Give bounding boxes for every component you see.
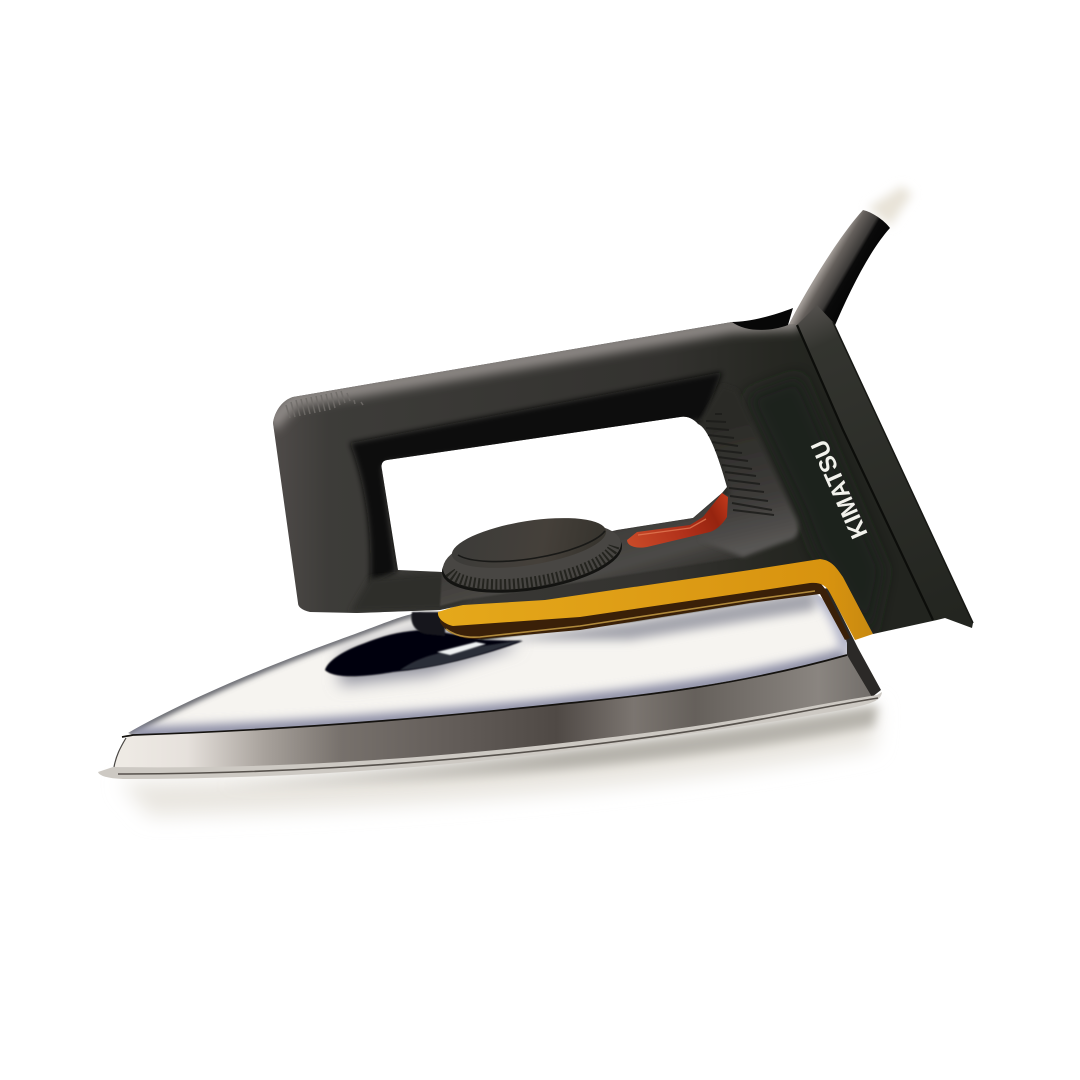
cord socket notch [732, 308, 793, 330]
brand label: KIMATSU [806, 436, 873, 543]
rear plate [797, 305, 973, 628]
power cable [786, 186, 912, 330]
dial top [449, 509, 609, 577]
front ledge [440, 492, 738, 606]
thumb wedge [700, 385, 798, 557]
tip detail [114, 738, 126, 767]
right rim edge [818, 588, 881, 697]
soleplate upper dome [128, 593, 847, 735]
dark area on the rear [750, 385, 879, 634]
yellow trim [438, 558, 873, 640]
left ledge [350, 572, 470, 612]
product illustration: Kimatsu iron [98, 184, 974, 822]
chrome dark reflection [325, 630, 523, 676]
heel grip ridges [286, 391, 363, 418]
temperature dial [437, 509, 627, 604]
dark recess around window [350, 372, 722, 585]
thumb rest ridges [706, 414, 774, 515]
crease line [122, 655, 847, 737]
red lever [627, 493, 728, 548]
knurled edge [450, 546, 614, 585]
reflection on surface [120, 705, 878, 816]
top edge highlight [270, 322, 800, 425]
gold underside of trim [440, 570, 850, 640]
soleplate lower band [113, 655, 876, 773]
chrome soleplate [98, 586, 882, 779]
black handle body [270, 322, 937, 640]
soleplate rim [98, 692, 882, 779]
